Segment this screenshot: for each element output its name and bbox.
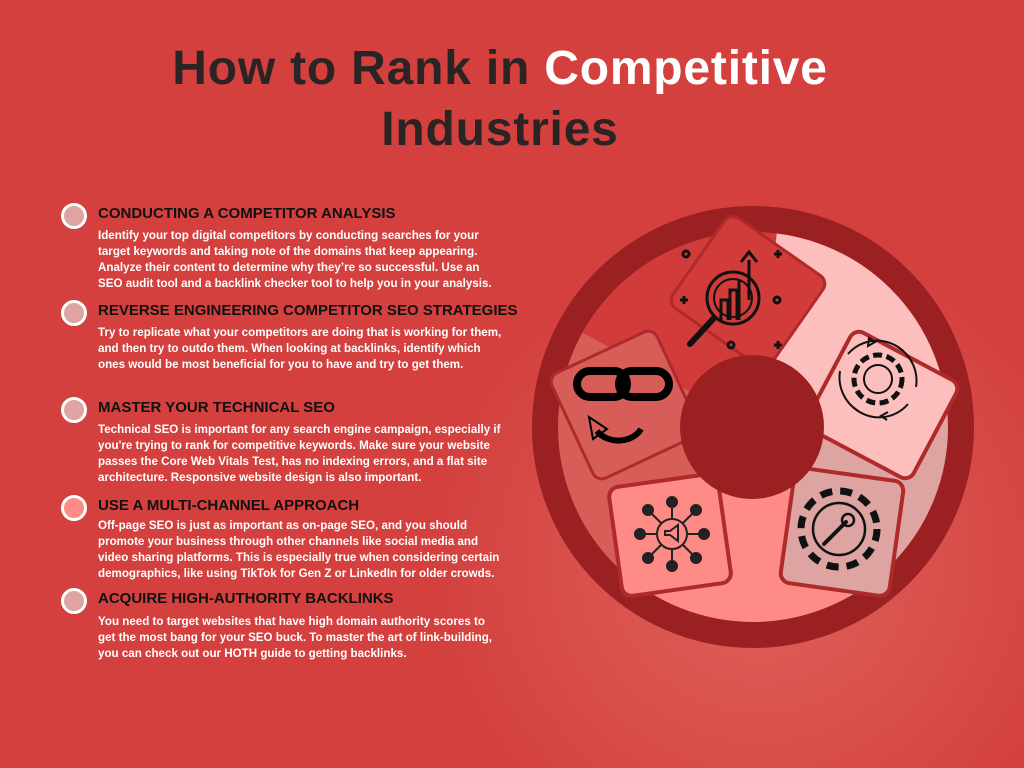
item: technical seo: passes the Core Web Vitals Test, has no indexing errors, and a flat site — [98, 455, 487, 468]
item: competitor analysis: Identify your top digital competitors by conducting searches for your — [98, 229, 479, 242]
item: multi-channel: promote your business through other channels like social media and — [98, 535, 478, 548]
item: multi-channel: video sharing platforms. This is especially true when considering certain — [98, 551, 499, 564]
item: competitor analysis: Analyze their content to determine why they’re so successful. Use an — [98, 261, 479, 274]
icon: megaphone network — [635, 497, 709, 571]
icon: gear cycle — [840, 338, 916, 420]
item: competitor analysis: target keywords and taking note of the domains that keep appearing. — [98, 245, 477, 258]
item: reverse engineering: REVERSE ENGINEERING COMPETITOR SEO STRATEGIES — [98, 302, 518, 319]
item: technical seo: MASTER YOUR TECHNICAL SEO — [98, 399, 335, 416]
icon: gear wrench — [801, 491, 877, 567]
item: multi-channel: demographics, like using TikTok for Gen Z or LinkedIn for older crowds. — [98, 567, 494, 580]
item: technical seo: you're trying to rank for competitive keywords. Make sure your website — [98, 439, 490, 452]
item: competitor analysis — [61, 203, 492, 290]
item: reverse engineering — [61, 300, 518, 371]
item: backlinks: you can check out our HOTH guide to getting backlinks. — [98, 647, 407, 660]
item: competitor analysis: SEO audit tool and a backlink checker tool to help you in your analysis. — [98, 277, 492, 290]
item: competitor analysis: CONDUCTING A COMPETITOR ANALYSIS — [98, 205, 396, 222]
item: multi-channel — [61, 495, 499, 580]
item: backlinks: get the most bang for your SEO buck. To master the art of link-building, — [98, 631, 492, 644]
item: technical seo — [61, 397, 500, 484]
item: reverse engineering: ones would be most beneficial for you to have and try to get them. — [98, 358, 463, 371]
item: backlinks: You need to target websites that have high domain authority scores to — [98, 615, 485, 628]
title — [172, 42, 828, 156]
icon: analytics magnifier — [680, 250, 782, 349]
item: reverse engineering: and then try to outdo them. When looking at backlinks, identify which — [98, 342, 481, 355]
title: How to Rank in Competitive — [172, 42, 828, 95]
icon: chain link with arrow — [577, 371, 669, 441]
item: technical seo: Technical SEO is important for any search engine campaign, especially if — [98, 423, 500, 436]
item: multi-channel: USE A MULTI-CHANNEL APPROACH — [98, 497, 359, 514]
item: backlinks: ACQUIRE HIGH-AUTHORITY BACKLINKS — [98, 590, 394, 607]
item: backlinks — [61, 588, 492, 660]
item: reverse engineering: Try to replicate what your competitors are doing that is working for them, — [98, 326, 501, 339]
item: multi-channel: Off-page SEO is just as important as on-page SEO, and you should — [98, 519, 467, 532]
item: technical seo: architecture. Responsive website design is also important. — [98, 471, 421, 484]
title: Industries — [381, 103, 619, 156]
